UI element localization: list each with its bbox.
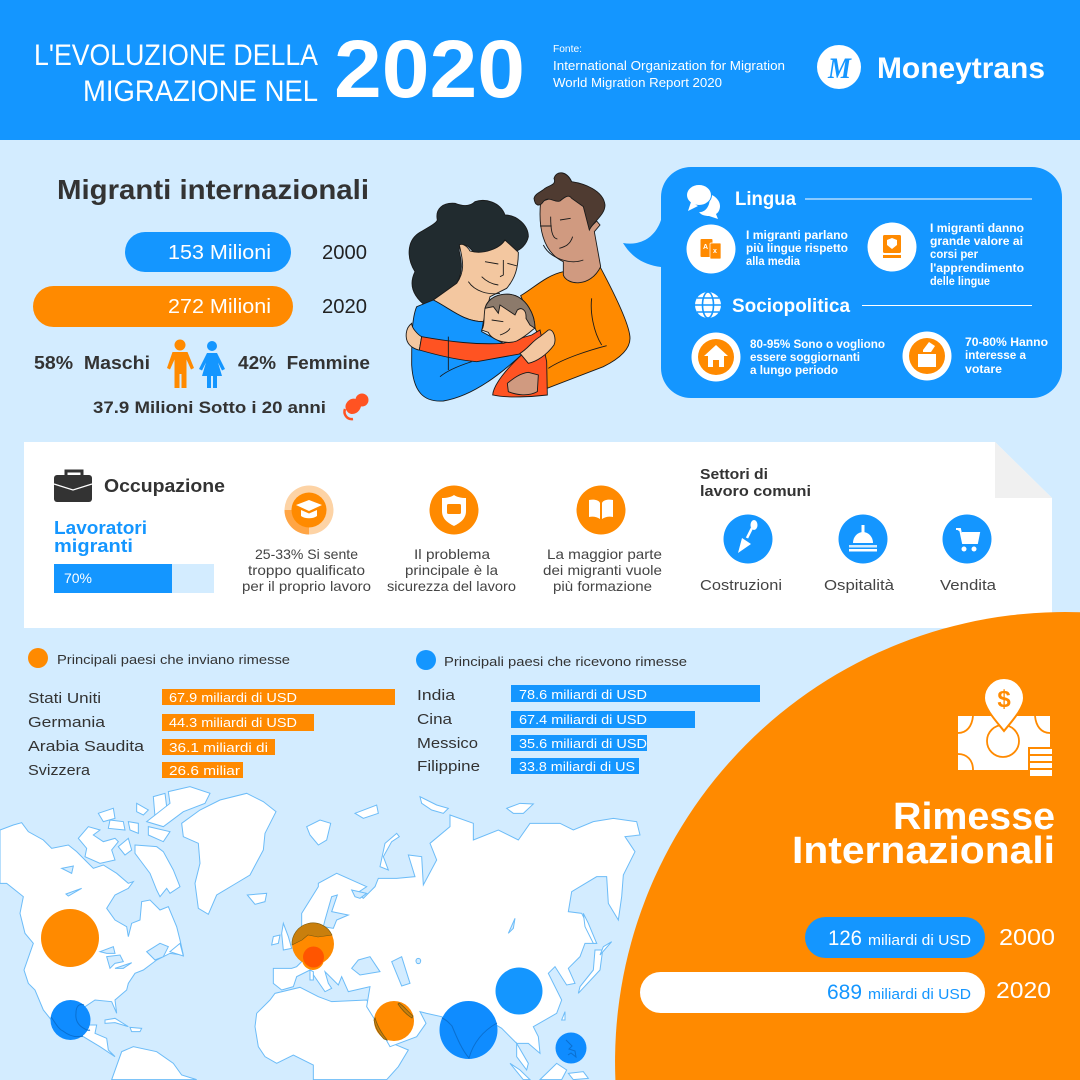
item: parlano più lingue: alla media xyxy=(746,256,801,268)
pill: 2020: 689 xyxy=(827,981,862,1004)
icon: woman xyxy=(199,341,225,388)
sector: retail: Vendita xyxy=(940,577,997,594)
stat: overqualified: 25-33% Si sente xyxy=(255,546,358,562)
bar chart: receivers: Cina xyxy=(417,711,453,728)
legend: receivers xyxy=(416,650,687,670)
pill: 2000: 126 xyxy=(828,927,862,950)
title: 2020 xyxy=(334,24,525,115)
pill: 2020 xyxy=(33,286,367,327)
bar chart: senders: Arabia Saudita xyxy=(28,738,145,755)
stat: training: più formazione xyxy=(553,578,652,594)
logo: Moneytrans xyxy=(817,45,1045,89)
icon: money with location pin: $ xyxy=(997,686,1011,713)
bubble: Arabia Saudita xyxy=(374,1001,414,1041)
heading: settori xyxy=(700,467,811,500)
bubble: Germania xyxy=(292,923,334,970)
sector: construction xyxy=(700,514,782,594)
heading: Occupazione: Occupazione xyxy=(104,476,225,496)
progress bar: 70%: 70% xyxy=(64,570,92,586)
world map xyxy=(0,787,640,1080)
item: soggiornanti: a lungo periodo xyxy=(750,365,838,377)
sector: hospitality: Ospitalità xyxy=(824,577,895,594)
heading: lavoratori migranti: Lavoratori xyxy=(54,518,147,538)
stat: job security: Il problema xyxy=(414,546,490,562)
pill: 2000 xyxy=(125,232,367,272)
gender split: 58% Maschi xyxy=(34,353,150,373)
pill: 2000 xyxy=(805,917,1055,958)
sector: construction: Costruzioni xyxy=(700,577,782,594)
title: MIGRAZIONE NEL xyxy=(83,75,318,108)
map: Americas and Greenland xyxy=(0,787,276,1080)
item: voto: 70-80% Hanno xyxy=(965,337,1048,349)
pill: 2020: 2020 xyxy=(322,296,367,318)
pill: 2020 xyxy=(640,972,1051,1013)
bar chart: senders: 44.3 miliardi di USD xyxy=(169,715,297,730)
icon: globe xyxy=(695,292,721,318)
title: L'EVOLUZIONE DELLA xyxy=(34,39,318,72)
bar chart: receivers: 67.4 miliardi di USD xyxy=(519,712,647,727)
bubble: Cina xyxy=(496,968,542,1014)
item: voto xyxy=(902,332,1048,380)
heading: Rimesse xyxy=(893,796,1055,838)
heading: Internazionali xyxy=(792,830,1055,872)
pill: 2020: miliardi di USD xyxy=(868,986,971,1003)
heading: settori: lavoro comuni xyxy=(700,484,811,500)
gender split: 42% Femmine xyxy=(238,353,370,373)
title xyxy=(34,24,525,115)
item: soggiornanti: essere soggiornanti xyxy=(750,352,860,364)
item: corsi di lingua xyxy=(868,222,1024,288)
source note: International Organization for Migration xyxy=(553,58,785,73)
item: soggiornanti xyxy=(692,332,885,382)
legend: senders xyxy=(28,648,290,668)
item: parlano più lingue xyxy=(686,224,848,274)
pill: 2000: 2000 xyxy=(322,242,367,264)
heading: Migranti internazionali xyxy=(57,174,369,205)
bubble: Stati Uniti xyxy=(41,909,99,967)
bar chart: senders: 26.6 miliar xyxy=(169,763,241,778)
stat: training xyxy=(543,486,662,594)
bar chart: receivers: 78.6 miliardi di USD xyxy=(519,687,647,702)
bubble: Filippine xyxy=(556,1032,586,1064)
panel: occupazione xyxy=(24,442,1052,628)
item: parlano più lingue: x xyxy=(713,248,717,255)
icon: chat bubbles xyxy=(686,184,720,219)
stat: overqualified xyxy=(242,486,371,594)
progress bar: 70% xyxy=(54,564,214,593)
heading: lavoratori migranti: migranti xyxy=(54,536,133,556)
map: Eurasia and Africa xyxy=(255,797,640,1080)
heading: settori: Settori di xyxy=(700,467,768,483)
sector: hospitality xyxy=(824,514,895,594)
heading: Lingua: Lingua xyxy=(735,189,796,210)
item: corsi di lingua: I migranti danno xyxy=(930,223,1024,235)
item: corsi di lingua: delle lingue xyxy=(930,276,990,288)
bubble: India xyxy=(440,1001,498,1059)
pill: 2000: 2000 xyxy=(999,924,1055,950)
logo: Moneytrans: M xyxy=(827,52,852,85)
bar chart: senders: 67.9 miliardi di USD xyxy=(169,690,297,705)
item: corsi di lingua: l'apprendimento xyxy=(930,263,1024,275)
pill: 2000: miliardi di USD xyxy=(868,932,971,949)
icon: briefcase xyxy=(54,471,92,502)
pill: 2000: 153 Milioni xyxy=(168,242,271,264)
icon: pacifier xyxy=(344,394,368,419)
bar chart: senders: 36.1 miliardi di xyxy=(169,740,268,755)
panel: rimesse internazionali xyxy=(615,612,1080,1080)
heading: lavoratori migranti xyxy=(54,518,147,556)
stat: training: dei migranti vuole xyxy=(543,562,662,578)
heading xyxy=(792,796,1055,872)
heading: Sociopolitica: Sociopolitica xyxy=(732,296,850,317)
source note: Fonte: xyxy=(553,43,582,55)
header band xyxy=(0,0,1080,140)
stat: overqualified: troppo qualificato xyxy=(248,562,365,578)
bar chart: senders: Germania xyxy=(28,714,106,731)
icon: man xyxy=(167,340,194,388)
item: parlano più lingue: I migranti parlano xyxy=(746,230,848,242)
stat: job security: sicurezza del lavoro xyxy=(387,578,516,594)
illustration: family xyxy=(406,173,630,401)
bar chart: receivers: India xyxy=(417,687,456,704)
item: voto: interesse a xyxy=(965,350,1027,362)
bar chart: receivers: Messico xyxy=(417,735,478,752)
stat: training: La maggior parte xyxy=(547,546,662,562)
bar chart: receivers xyxy=(417,685,760,775)
source note xyxy=(553,43,785,90)
panel: lingua e sociopolitica callout xyxy=(623,167,1062,398)
pill: 2020: 272 Milioni xyxy=(168,296,271,318)
bar chart: senders: Svizzera xyxy=(28,762,91,779)
item: voto: votare xyxy=(965,364,1002,376)
stat: job security xyxy=(387,486,516,594)
item: parlano più lingue: più lingue rispetto xyxy=(746,243,848,255)
stat: overqualified: per il proprio lavoro xyxy=(242,578,371,594)
bar chart: senders xyxy=(28,689,395,779)
map bubbles: senders and receivers xyxy=(41,909,586,1064)
under 20 line: 37.9 Milioni Sotto i 20 anni xyxy=(93,399,326,417)
sector: retail xyxy=(940,514,997,594)
panel: migranti internazionali xyxy=(33,174,370,419)
bar chart: receivers: 35.6 miliardi di USD xyxy=(519,736,647,751)
legend: senders: Principali paesi che inviano rimesse xyxy=(57,652,290,667)
bubble: Messico xyxy=(50,1000,90,1040)
item: parlano più lingue: A xyxy=(703,244,708,251)
gender split xyxy=(34,340,370,388)
bubble: Svizzera xyxy=(303,946,324,968)
source note: World Migration Report 2020 xyxy=(553,75,722,90)
item: corsi di lingua: corsi per xyxy=(930,249,979,261)
bar chart: receivers: 33.8 miliardi di US xyxy=(519,759,635,774)
legend: receivers: Principali paesi che ricevono rimesse xyxy=(444,654,687,669)
item: soggiornanti: 80-95% Sono o vogliono xyxy=(750,339,885,351)
icon: money with location pin xyxy=(958,678,1054,778)
item: corsi di lingua: grande valore ai xyxy=(930,236,1023,248)
logo: Moneytrans: Moneytrans xyxy=(877,52,1045,85)
bar chart: receivers: Filippine xyxy=(417,758,480,775)
stat: job security: principale è la xyxy=(405,562,498,578)
bar chart: senders: Stati Uniti xyxy=(28,690,101,707)
pill: 2020: 2020 xyxy=(996,977,1051,1003)
